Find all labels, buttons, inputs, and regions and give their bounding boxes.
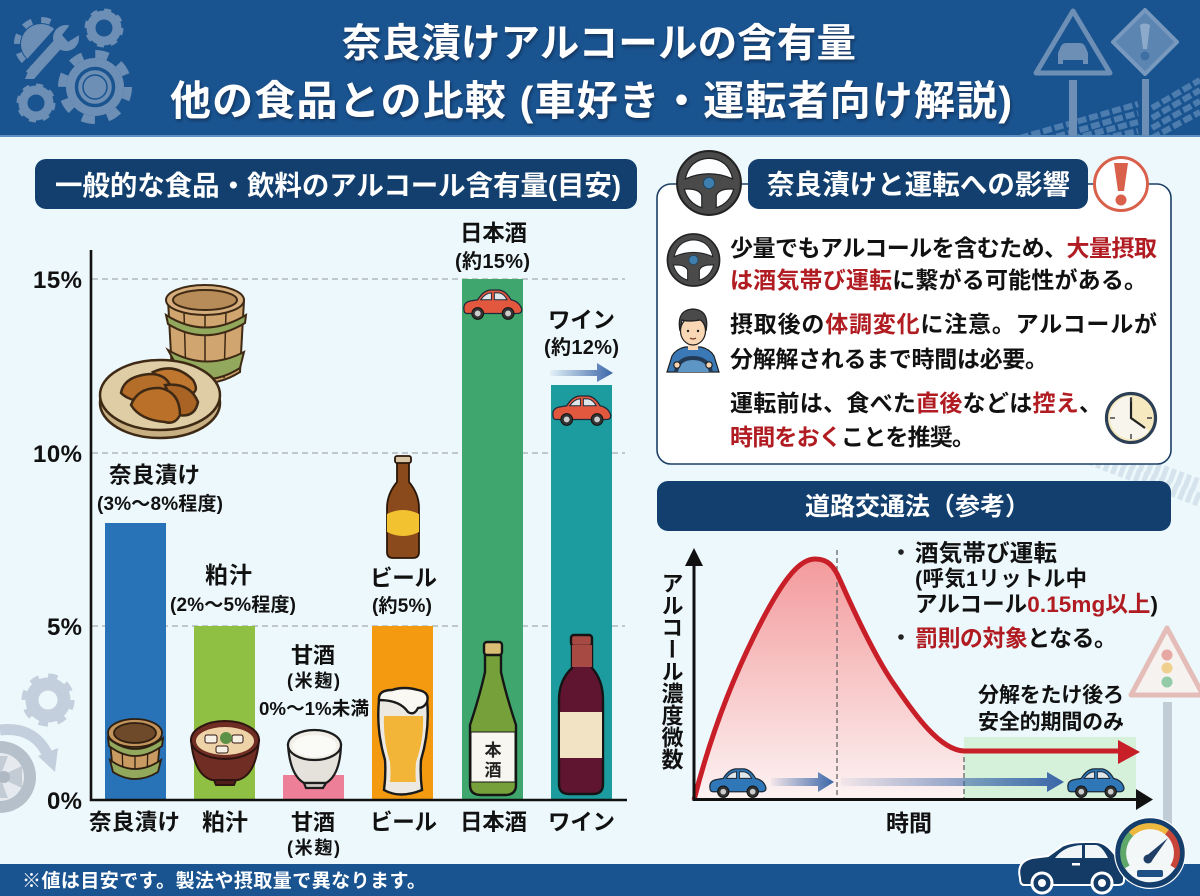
text: caution 3: [730, 390, 1102, 450]
chart: alcohol concentration over time: [658, 548, 1153, 836]
text: caution 1: [730, 235, 1157, 293]
panel: effects on driving: [657, 151, 1171, 464]
bar: 粕汁: [194, 626, 255, 799]
heading: driving effects: 奈良漬けと運転への影響: [767, 169, 1070, 200]
panel: food and drink alcohol chart: [0, 159, 637, 858]
label: ビール: [370, 566, 437, 617]
icon: steering wheel header: [677, 151, 741, 215]
title: 他の食品との比較 (車好き・運転者向け解説): [170, 78, 1012, 124]
bar: ワイン: [551, 385, 612, 799]
x axis labels: [89, 809, 615, 858]
label: 奈良漬け: (3%〜8%程度): [97, 493, 223, 515]
footer note: ※値は目安です。製法や摂取量で異なります。: [22, 870, 426, 892]
x axis labels: ワイン: [548, 810, 615, 835]
text: legal explanation: 酒気帯び運転: [915, 540, 1058, 566]
y axis labels: 0%: [47, 788, 82, 815]
text: safe period note: [978, 684, 1124, 734]
x axis labels: ビール: [370, 810, 437, 835]
title: 奈良漬けアルコールの含有量: [342, 22, 856, 66]
icon: car with speedometer: [1019, 817, 1186, 893]
arrow: first stage: [771, 772, 834, 792]
heading: chart section: 一般的な食品・飲料のアルコール含有量(目安): [55, 170, 621, 201]
label: 甘酒: [259, 643, 369, 719]
icon: kasujiru bowl: [191, 721, 259, 785]
x axis labels: 粕汁: [202, 809, 248, 835]
decorative gear and tire: [0, 677, 71, 813]
label: ビール: ビール: [370, 566, 437, 591]
y axis labels: 15%: [33, 267, 82, 294]
text: caution 2: [730, 311, 1157, 372]
icon: warning circle: [1094, 158, 1148, 210]
x axis labels: 奈良漬け: [89, 810, 180, 835]
icon: steering wheel: [667, 234, 720, 286]
label: 粕汁: [170, 562, 296, 616]
text: safe period note: 分解をたけ後ろ: [978, 684, 1124, 707]
label: 奈良漬け: 奈良漬け: [109, 463, 200, 488]
arrow: second stage: [841, 772, 1064, 792]
icon: road signs: [1036, 10, 1177, 136]
icon: gears and wrench: [17, 11, 128, 120]
x axis labels: 甘酒: [291, 810, 335, 835]
text: caution 2: 分解解されるまで時間は必要。: [730, 346, 1048, 372]
header band: [0, 0, 1200, 144]
text: legal explanation: [898, 540, 1158, 651]
text: caution 1: は酒気帯び運転に繋がる可能性がある。: [730, 267, 1147, 293]
label: 日本酒: 日本酒: [460, 221, 527, 246]
heading: road traffic law: 道路交通法（参考）: [805, 493, 1030, 521]
text: caution 3: 運転前は、食べた直後などは控え、: [730, 390, 1102, 416]
icon: clock: [1106, 394, 1156, 442]
icon: barrel and plate of narazuke: [100, 285, 246, 438]
text: legal explanation: (呼気1リットル中: [915, 567, 1087, 591]
barrel: [166, 285, 246, 386]
heading: driving effects: [748, 159, 1088, 209]
decorative tire tracks behind right panel: [1090, 458, 1200, 500]
bar: 甘酒: [283, 775, 344, 799]
text: legal explanation: 罰則の対象となる。: [915, 625, 1117, 651]
label: 奈良漬け: [97, 463, 223, 515]
icon: red car on sake bar: [464, 290, 522, 319]
icon: faded traffic sign: [1131, 628, 1200, 837]
bar: 奈良漬け: [105, 523, 166, 799]
label: 甘酒: (米麹): [287, 671, 340, 691]
label: 日本酒: [455, 221, 530, 273]
icon: sake bottle: [470, 642, 516, 795]
axes: [91, 250, 627, 800]
icon: amazake cup: [288, 730, 341, 788]
x axis labels: 日本酒: [460, 810, 527, 835]
y axis labels: [33, 267, 82, 815]
icon: tire tracks: [1020, 78, 1200, 135]
heading: chart section: [35, 159, 637, 209]
text: caution 1: 少量でもアルコールを含むため、大量摂取: [730, 235, 1157, 261]
axis label: x: 時間: [886, 810, 932, 836]
icon: blue car start: [710, 769, 766, 797]
dashed markers: [837, 550, 964, 798]
footer band: [0, 864, 1200, 896]
label: 日本酒: (約15%): [455, 250, 530, 273]
icon: blue car end: [1068, 769, 1124, 797]
text: safe period note: 安全的期間のみ: [978, 711, 1124, 734]
bar: ビール: [372, 626, 433, 799]
label: 粕汁: 粕汁: [205, 562, 252, 588]
icon: driver person: [667, 309, 719, 372]
text: caution 2: 摂取後の体調変化に注意。アルコールが: [730, 311, 1157, 337]
label: ワイン: (約12%): [544, 336, 619, 359]
curve line with arrow: [694, 559, 1140, 800]
icon: wine bottle: [559, 635, 603, 794]
y axis labels: 10%: [33, 441, 82, 468]
curve area: [694, 559, 964, 800]
icon: small barrel: [108, 719, 163, 780]
title: [170, 22, 1012, 124]
heading: road traffic law: [657, 481, 1171, 531]
label: 粕汁: (2%〜5%程度): [170, 594, 296, 616]
safe zone: [964, 737, 1136, 800]
axis label: y: アルコール濃度微数: [658, 572, 684, 770]
axes: [685, 548, 1153, 810]
arrow: wine trend: [550, 363, 613, 382]
label: ワイン: ワイン: [548, 308, 615, 333]
bar: 日本酒: [462, 279, 523, 799]
icon: beer bottle: [387, 456, 419, 558]
label: ビール: (約5%): [372, 595, 432, 617]
label: 甘酒: 甘酒: [291, 643, 335, 668]
plate: [100, 360, 220, 438]
text: legal explanation: アルコール0.15mg以上): [915, 592, 1158, 617]
label: 甘酒: 0%〜1%未満: [259, 698, 369, 719]
icon: beer glass: [378, 688, 428, 794]
text: caution 3: 時間をおくことを推奨。: [730, 424, 975, 450]
grid lines: [92, 279, 625, 626]
label: ワイン: [544, 308, 619, 359]
icon: red car on wine bar: [553, 396, 611, 425]
icon: sake bottle: 本: [484, 741, 502, 760]
y axis labels: 5%: [47, 614, 82, 641]
x axis labels: (米麹): [287, 838, 340, 858]
icon: sake bottle: 酒: [484, 761, 502, 780]
